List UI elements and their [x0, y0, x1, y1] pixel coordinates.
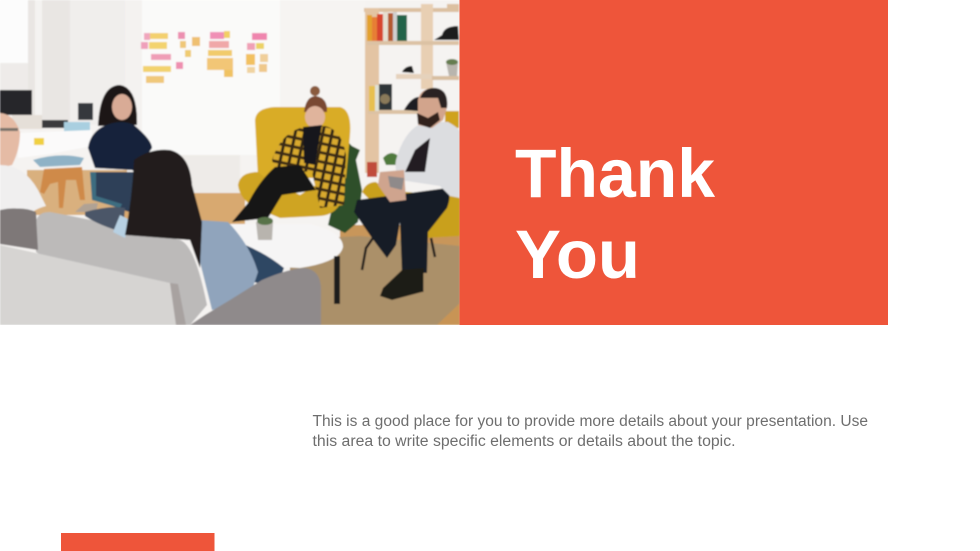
desk area with monitor and table	[0, 90, 93, 208]
yellow armchair and woman in plaid jacket	[232, 86, 350, 222]
bookshelf with books	[364, 4, 459, 177]
left sofa	[0, 208, 207, 325]
woman in navy top	[75, 85, 152, 214]
plant behind chair	[328, 140, 362, 233]
white coffee table with potted plant	[222, 217, 343, 304]
yellow armchair and bearded man in grey blazer	[354, 88, 460, 300]
orange accent bar	[61, 533, 214, 551]
heading: Thank You	[515, 135, 716, 293]
room walls and floor	[0, 0, 460, 325]
body text	[312, 413, 868, 450]
woman seen from behind	[85, 150, 284, 310]
body text: This is a good place for you to provide more details about your presentation. Use	[312, 413, 868, 430]
heading: Thank You: Thank	[515, 135, 716, 212]
photo: team meeting in a bright office	[0, 0, 460, 325]
body text: this area to write specific elements or details about the topic.	[312, 433, 736, 450]
orange title panel	[460, 0, 888, 325]
seated man at far left	[0, 112, 46, 220]
sticky notes on the whiteboard	[141, 31, 268, 83]
rug	[290, 236, 460, 325]
grey sofa in foreground	[190, 268, 321, 325]
heading: Thank You: You	[515, 216, 640, 293]
